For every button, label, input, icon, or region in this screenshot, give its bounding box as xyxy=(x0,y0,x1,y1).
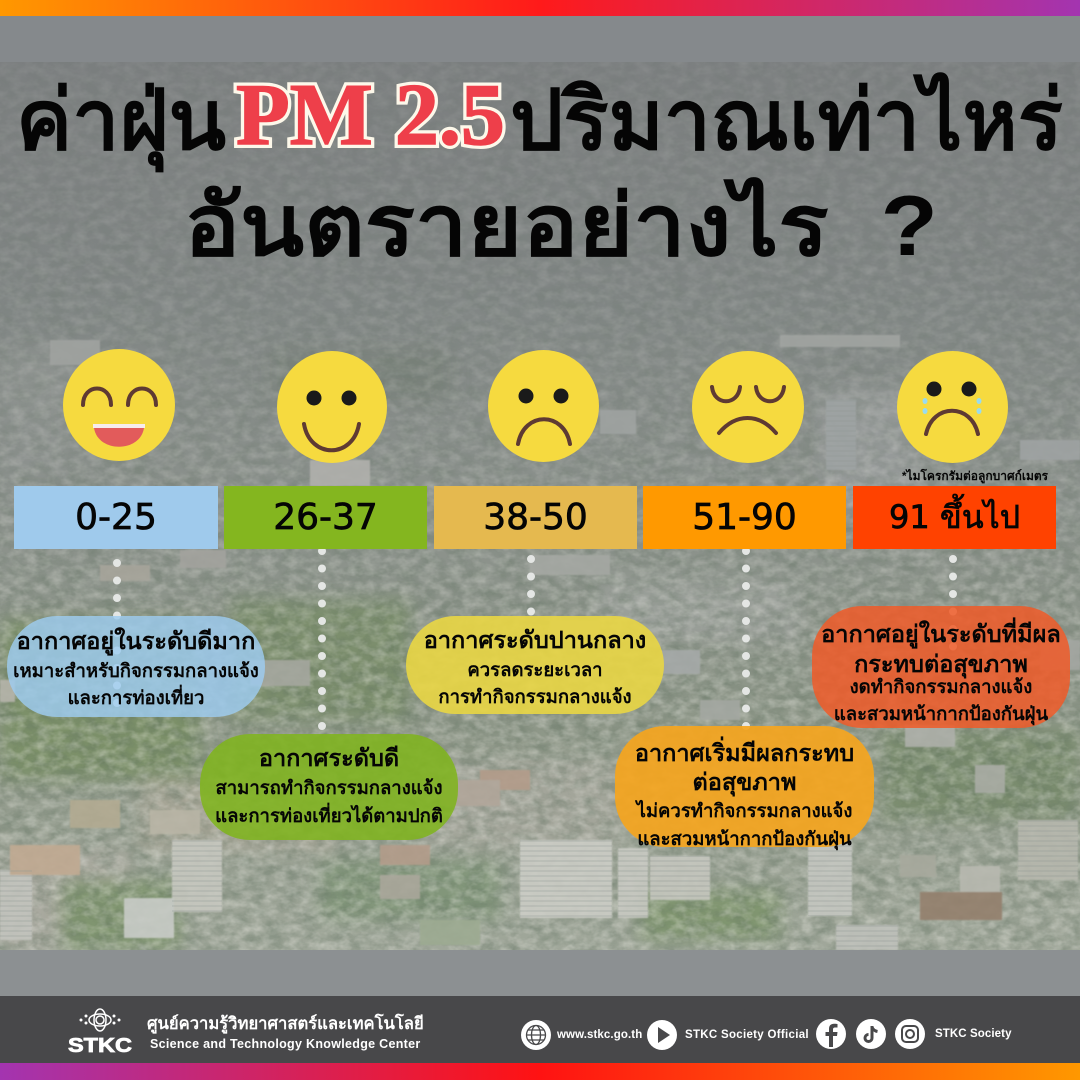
emoji: smile xyxy=(277,351,387,463)
title xyxy=(16,67,1063,274)
pill: moderate xyxy=(406,616,664,714)
emoji: sad xyxy=(488,350,599,462)
top gradient strip xyxy=(0,0,1080,16)
range bar 0-25 xyxy=(14,486,218,549)
icon: globe xyxy=(521,1020,551,1050)
range bar 91+ xyxy=(853,486,1056,549)
pill: very good xyxy=(7,616,265,717)
pill body: สามารถทำกิจกรรมกลางแจ้ง xyxy=(215,777,443,798)
pill heading: อากาศเริ่มมีผลกระทบ xyxy=(635,740,854,766)
STKC logo xyxy=(68,1008,132,1056)
title line 2: อันตรายอย่างไร ? xyxy=(184,179,938,274)
pill heading xyxy=(821,617,1061,678)
range bar 26-37: 26-37 xyxy=(273,497,378,538)
pill heading xyxy=(635,736,854,796)
emoji: unhappy eyes closed xyxy=(692,351,804,463)
title line 1 part: ค่าฝุ่น: ค่าฝุ่น xyxy=(16,73,226,167)
pill body: เหมาะสำหรับกิจกรรมกลางแจ้ง xyxy=(13,660,259,681)
pill body: และการท่องเที่ยวได้ตามปกติ xyxy=(215,805,443,826)
youtube name: STKC Society Official xyxy=(685,1029,809,1041)
icon: instagram xyxy=(895,1019,925,1049)
unit note: *ไมโครกรัมต่อลูกบาศก์เมตร xyxy=(902,469,1048,483)
pill body: และการท่องเที่ยว xyxy=(68,687,204,708)
pill body xyxy=(634,800,852,850)
range bar 26-37 xyxy=(224,486,427,549)
bottom gradient strip xyxy=(0,1063,1080,1080)
building windows xyxy=(0,400,1078,950)
pill heading: ต่อสุขภาพ xyxy=(693,769,796,795)
pill heading: อากาศระดับดี xyxy=(259,745,399,771)
pill body xyxy=(13,660,259,708)
pill: affects health xyxy=(812,606,1070,728)
center name English: Science and Technology Knowledge Center xyxy=(150,1037,421,1051)
pill body xyxy=(834,676,1048,726)
pill body: และสวมหน้ากากป้องกันฝุ่น xyxy=(834,703,1048,724)
pill body: งดทำกิจกรรมกลางแจ้ง xyxy=(850,676,1032,697)
pill heading: อากาศอยู่ในระดับที่มีผล xyxy=(821,621,1061,647)
dotted connector lines xyxy=(113,549,957,730)
range bar 51-90 xyxy=(643,486,846,549)
bottom gray band xyxy=(0,950,1080,996)
range bar 91+: 91 ขึ้นไป xyxy=(889,498,1020,536)
range bar 0-25: 0-25 xyxy=(75,497,157,538)
title PM 2.5 highlight: PM 2.5 xyxy=(236,67,505,164)
pill body xyxy=(438,659,632,707)
range bar 38-50 xyxy=(434,486,637,549)
title PM 2.5 highlight: PM 2.5 xyxy=(236,67,505,164)
emoji: very happy xyxy=(63,349,175,461)
footer xyxy=(0,996,1080,1063)
pill heading: อากาศอยู่ในระดับดีมาก xyxy=(17,628,255,654)
pill: good xyxy=(200,734,458,840)
icon: facebook xyxy=(816,1019,846,1049)
range bar 38-50: 38-50 xyxy=(483,497,588,538)
icon: play xyxy=(647,1020,677,1050)
top gray band xyxy=(0,16,1080,62)
range bar 51-90: 51-90 xyxy=(692,497,797,538)
pill body: การทำกิจกรรมกลางแจ้ง xyxy=(438,686,632,707)
pill: starting to affect health xyxy=(615,726,874,847)
emoji: crying xyxy=(897,351,1008,463)
social name: STKC Society xyxy=(935,1028,1012,1040)
pill body xyxy=(215,777,443,826)
website: www.stkc.go.th xyxy=(557,1029,642,1041)
title line 1 part: ปริมาณเท่าไหร่: ปริมาณเท่าไหร่ xyxy=(510,73,1063,167)
pill body: และสวมหน้ากากป้องกันฝุ่น xyxy=(637,828,852,849)
pill body: ควรลดระยะเวลา xyxy=(467,659,603,680)
icon: tiktok xyxy=(856,1019,886,1049)
pill body: ไม่ควรทำกิจกรรมกลางแจ้ง xyxy=(637,800,852,821)
pill heading: อากาศระดับปานกลาง xyxy=(424,627,646,653)
center name Thai: ศูนย์ความรู้วิทยาศาสตร์และเทคโนโลยี xyxy=(147,1014,424,1033)
pill heading: กระทบต่อสุขภาพ xyxy=(854,651,1028,677)
